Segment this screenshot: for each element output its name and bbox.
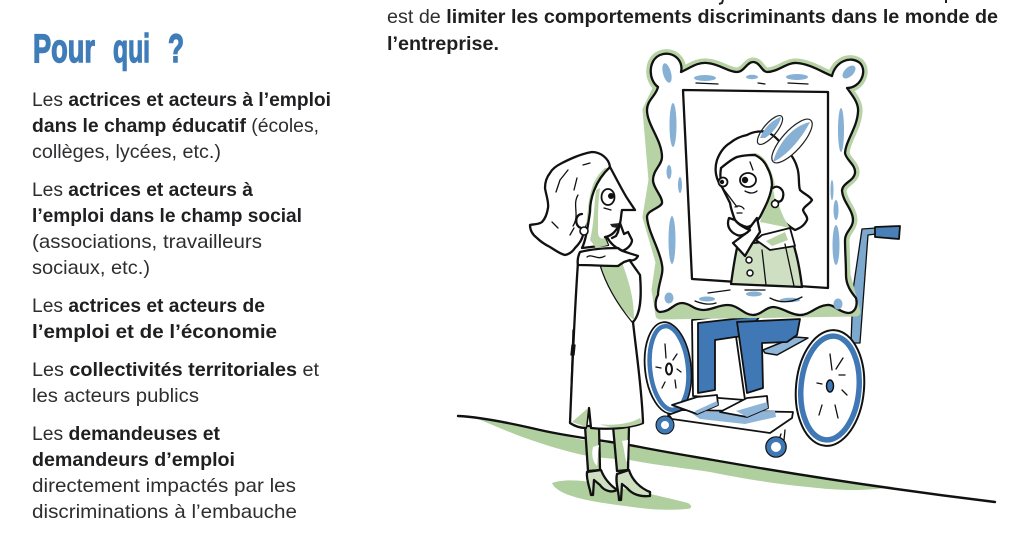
woman face bbox=[582, 167, 635, 248]
frame green shadow bbox=[647, 54, 863, 315]
right leg bbox=[737, 319, 800, 393]
frame accent lines bbox=[695, 83, 808, 304]
reflection face bbox=[720, 155, 772, 227]
woman shoes bbox=[587, 470, 650, 500]
reflection: woman in mirror bbox=[716, 112, 818, 287]
title: ? bbox=[168, 27, 184, 71]
audience: local authorities: Les collectivités territoriales et bbox=[32, 359, 320, 381]
left wheel bbox=[640, 320, 696, 416]
frame body bbox=[647, 54, 863, 315]
reflection halo ellipses bbox=[753, 112, 818, 168]
illustration: woman facing mirror showing her in a wheelchair bbox=[458, 54, 995, 510]
audience: employment and economy: l’emploi et de l’économie bbox=[32, 321, 277, 343]
coat green shade bbox=[572, 262, 642, 427]
left leg bbox=[698, 316, 760, 393]
coat detail lines bbox=[571, 265, 632, 390]
backrest bbox=[692, 315, 745, 400]
wheelchair bbox=[640, 226, 900, 457]
reflection coat bbox=[731, 240, 802, 287]
audience: social field: Les actrices et acteurs à bbox=[32, 179, 253, 201]
woman eye and mouth bbox=[602, 189, 620, 228]
audience: job seekers: discriminations à l’embauche bbox=[32, 501, 297, 523]
title bbox=[33, 27, 184, 71]
scarf fold line bbox=[587, 256, 605, 258]
woman standing bbox=[530, 152, 650, 500]
audience: educational field: Les actrices et acteurs à l’emploi bbox=[32, 89, 331, 111]
title: qui bbox=[113, 27, 150, 71]
mirror frame bbox=[647, 54, 863, 315]
audience: employment and economy bbox=[32, 295, 277, 343]
wheelchair handle and upright bbox=[851, 226, 900, 343]
footplate bbox=[668, 410, 793, 433]
shoes bbox=[672, 395, 768, 417]
audience: educational field: dans le champ éducatif (écoles, bbox=[32, 115, 319, 137]
audience: local authorities: les acteurs publics bbox=[32, 385, 199, 407]
audience: social field bbox=[32, 179, 302, 279]
reflection hair bbox=[716, 131, 812, 230]
audience: local authorities bbox=[32, 359, 320, 407]
audience: social field: l’emploi dans le champ social bbox=[32, 205, 302, 227]
text block: audience list bbox=[32, 89, 331, 523]
audience: employment and economy: Les actrices et acteurs de bbox=[32, 295, 265, 317]
woman ear and earring bbox=[576, 214, 588, 235]
ground bbox=[458, 416, 995, 510]
audience: social field: (associations, travailleurs bbox=[32, 231, 262, 253]
audience: educational field: collèges, lycées, etc.) bbox=[32, 141, 221, 163]
woman hair bbox=[530, 152, 610, 255]
audience: job seekers: Les demandeuses et bbox=[32, 423, 220, 445]
seat bbox=[763, 337, 808, 355]
hair detail lines bbox=[552, 163, 590, 235]
woman legs bbox=[585, 426, 629, 471]
title: Pour bbox=[33, 27, 95, 71]
text block: objective: est de limiter les comportements discriminants dans le monde de bbox=[387, 6, 998, 28]
clipped text fragments at top edge bbox=[719, 0, 946, 4]
text block: objective: l’entreprise. bbox=[387, 33, 499, 55]
audience: social field: sociaux, etc.) bbox=[32, 257, 150, 279]
reflection scarf and hand bbox=[728, 218, 795, 286]
face green shade bbox=[590, 188, 608, 248]
hair green shade bbox=[582, 168, 611, 248]
frame blue accents bbox=[661, 62, 858, 310]
audience: job seekers: directement impactés par les bbox=[32, 475, 296, 497]
reflection hair shade bbox=[721, 153, 790, 228]
right wheel bbox=[791, 327, 869, 449]
text block: objective bbox=[387, 6, 998, 55]
reflection ear and earring bbox=[772, 187, 783, 208]
woman hand bbox=[607, 223, 632, 251]
mirror glass bbox=[683, 90, 828, 288]
audience: job seekers: demandeurs d’emploi bbox=[32, 449, 235, 471]
reflection eyes and mouth bbox=[718, 162, 757, 213]
audience: job seekers bbox=[32, 423, 297, 523]
audience: educational field bbox=[32, 89, 331, 163]
front casters bbox=[656, 416, 786, 457]
woman coat bbox=[570, 258, 643, 429]
woman scarf bbox=[578, 248, 638, 266]
